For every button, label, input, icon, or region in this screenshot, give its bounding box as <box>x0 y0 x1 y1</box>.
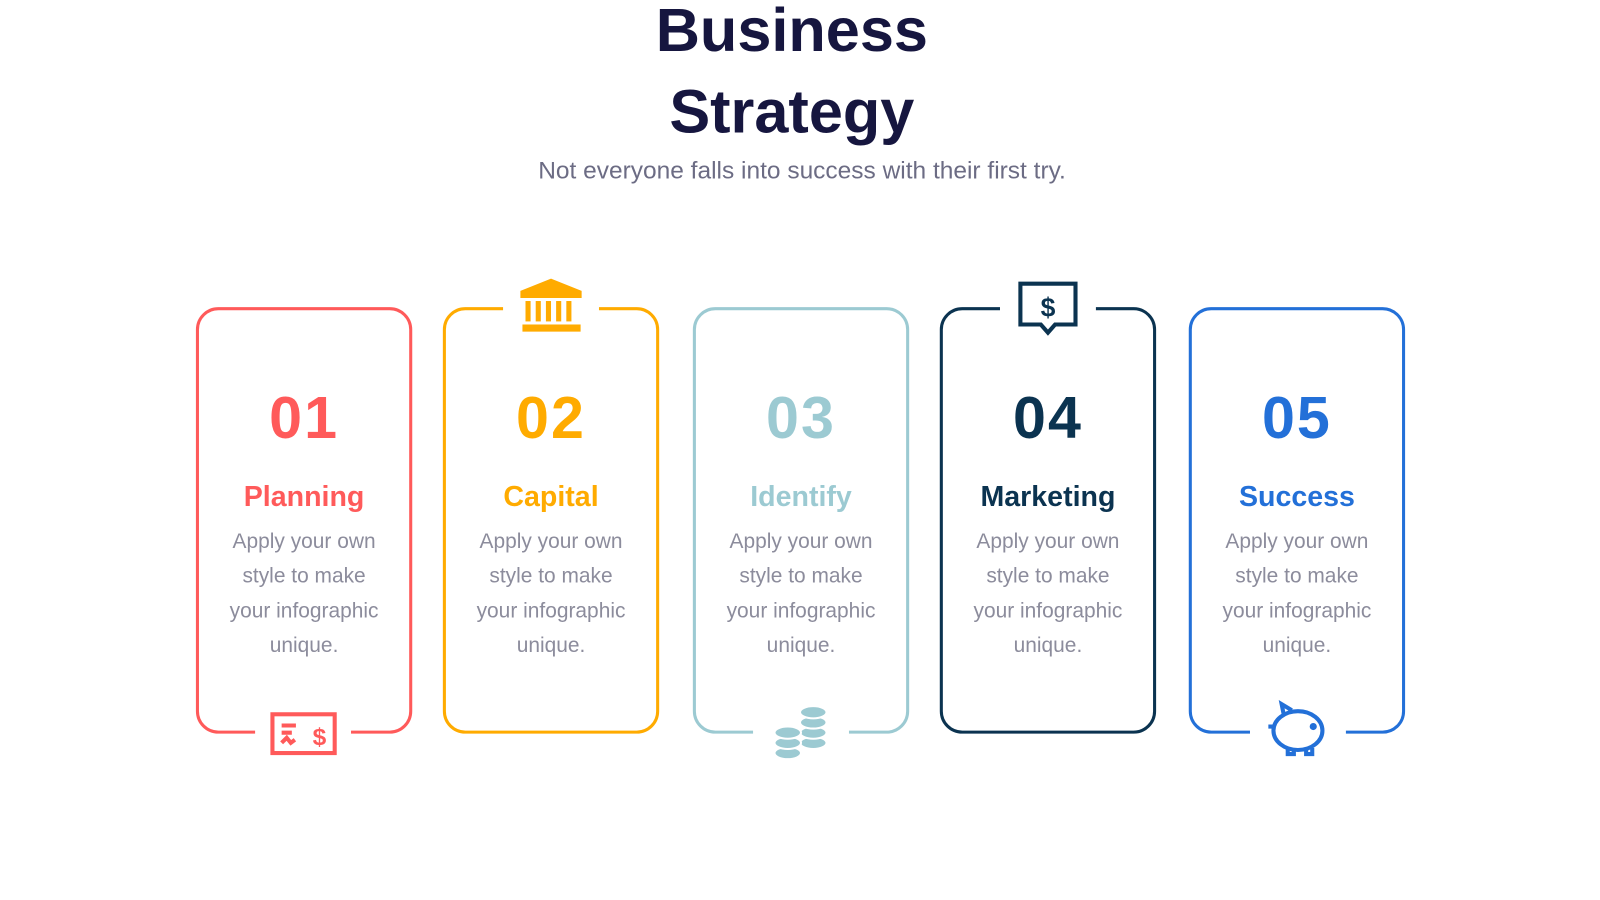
icon: cheque <box>272 714 335 753</box>
card 4: Marketing <box>980 481 1115 512</box>
card 4: Apply your own <box>976 530 1119 553</box>
card 1: style to make <box>242 564 366 588</box>
card 5: your infographic <box>1223 599 1371 622</box>
card 4: 04 <box>1013 385 1083 451</box>
card 1: Planning <box>244 481 364 512</box>
card 5: style to make <box>1235 564 1359 588</box>
card 1: your infographic <box>230 599 379 622</box>
card 2: style to make <box>489 564 613 588</box>
card 1: Apply your own <box>233 530 376 553</box>
card 2 <box>443 307 659 734</box>
card 4: unique. <box>1014 634 1082 657</box>
title: Strategy <box>669 78 914 146</box>
card 3: unique. <box>767 634 835 657</box>
card 5: Success <box>1239 481 1355 512</box>
card 4: style to make <box>986 564 1110 588</box>
icon: piggy bank <box>1268 704 1322 754</box>
card 2: 02 <box>516 385 586 451</box>
card 3: Apply your own <box>729 530 873 553</box>
card 1: 01 <box>269 385 339 451</box>
card 3: your infographic <box>727 599 875 622</box>
card 1 <box>196 307 412 734</box>
card 2: Apply your own <box>479 530 623 553</box>
card 4: your infographic <box>974 599 1122 622</box>
card 4 <box>940 307 1156 734</box>
icon: cheque: $ <box>313 724 327 751</box>
card 5 <box>1189 307 1405 734</box>
card 1: unique. <box>270 634 338 657</box>
icon: bank <box>520 279 582 332</box>
card 3: Identify <box>750 481 852 512</box>
subtitle: Not everyone falls into success with their first try. <box>538 157 1066 185</box>
card 2: unique. <box>517 634 585 657</box>
card 5: Apply your own <box>1225 530 1368 553</box>
card 5: unique. <box>1263 634 1331 657</box>
icon: dollar speech bubble: $ <box>1041 292 1056 322</box>
card 2: your infographic <box>477 599 625 622</box>
card 5: 05 <box>1262 385 1332 451</box>
card 3: style to make <box>739 564 863 588</box>
title <box>656 0 928 146</box>
card 3: 03 <box>766 385 836 451</box>
card 3 <box>693 307 909 734</box>
icon: dollar speech bubble <box>1020 284 1076 333</box>
icon: coins <box>774 706 827 759</box>
card 2: Capital <box>503 481 599 512</box>
